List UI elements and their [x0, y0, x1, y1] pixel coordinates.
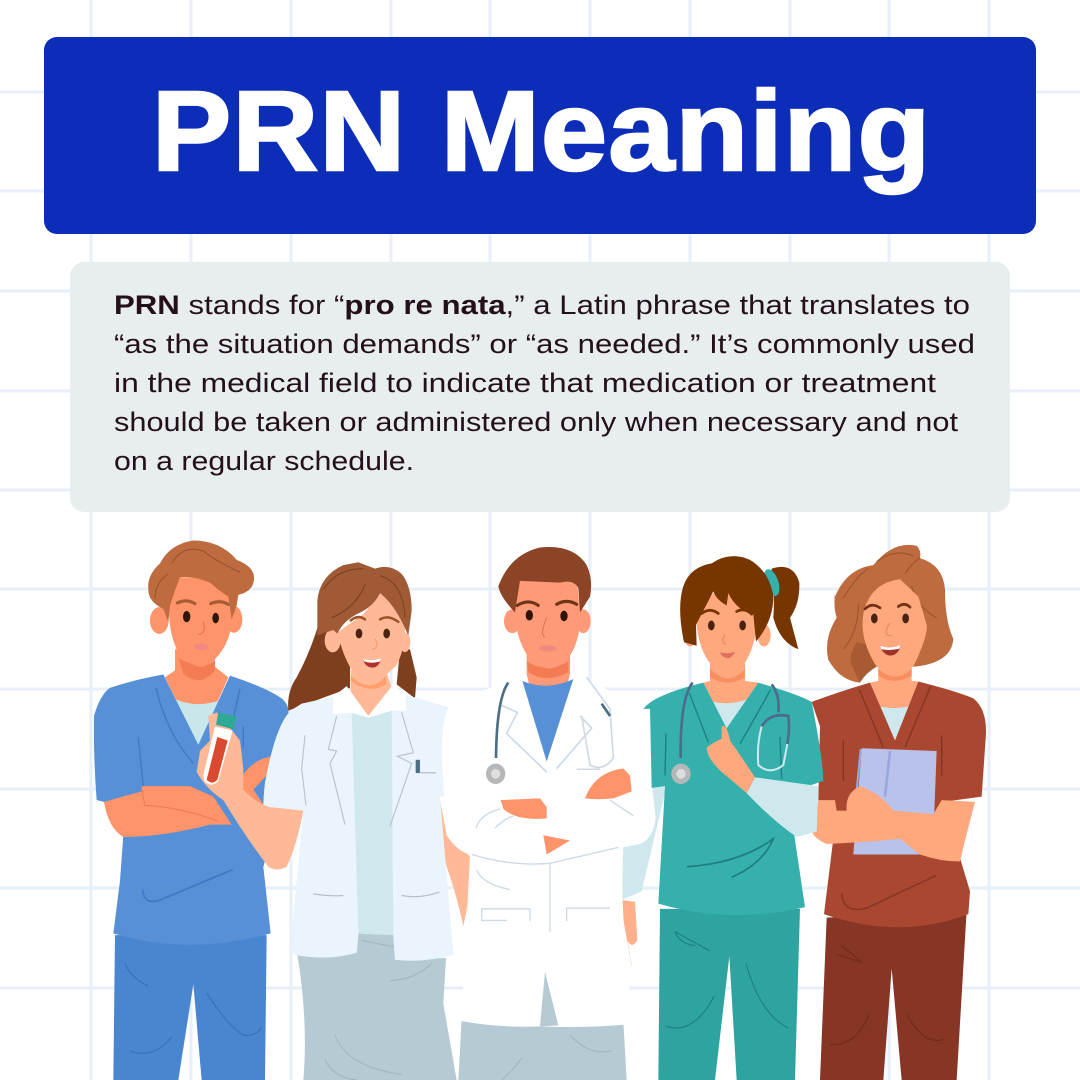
icon: test tube [204, 712, 237, 785]
person: nurse in teal scrubs [643, 556, 823, 1080]
title: PRN Meaning [152, 68, 930, 194]
definition text: PRN stands for “ pro re nata ,” a Latin phrase that translates to [114, 290, 970, 320]
person: nurse in blue scrubs [94, 541, 289, 1080]
illustration: medical team [94, 541, 986, 1080]
definition text: “as the situation demands” or “as needed.” It’s commonly used [114, 329, 975, 359]
icon: tablet [853, 748, 937, 854]
person: doctor in short white coat [197, 562, 470, 1080]
definition text: in the medical field to indicate that medication or treatment [114, 368, 937, 398]
definition text: should be taken or administered only when necessary and not [114, 407, 959, 437]
person: doctor with stethoscope [442, 547, 656, 1080]
definition text [114, 290, 975, 476]
definition text: on a regular schedule. [114, 446, 414, 476]
nurse far arm [622, 783, 667, 967]
title banner [44, 37, 1036, 234]
panel: definition [70, 262, 1010, 512]
person: nurse in brown scrubs [812, 545, 986, 1080]
